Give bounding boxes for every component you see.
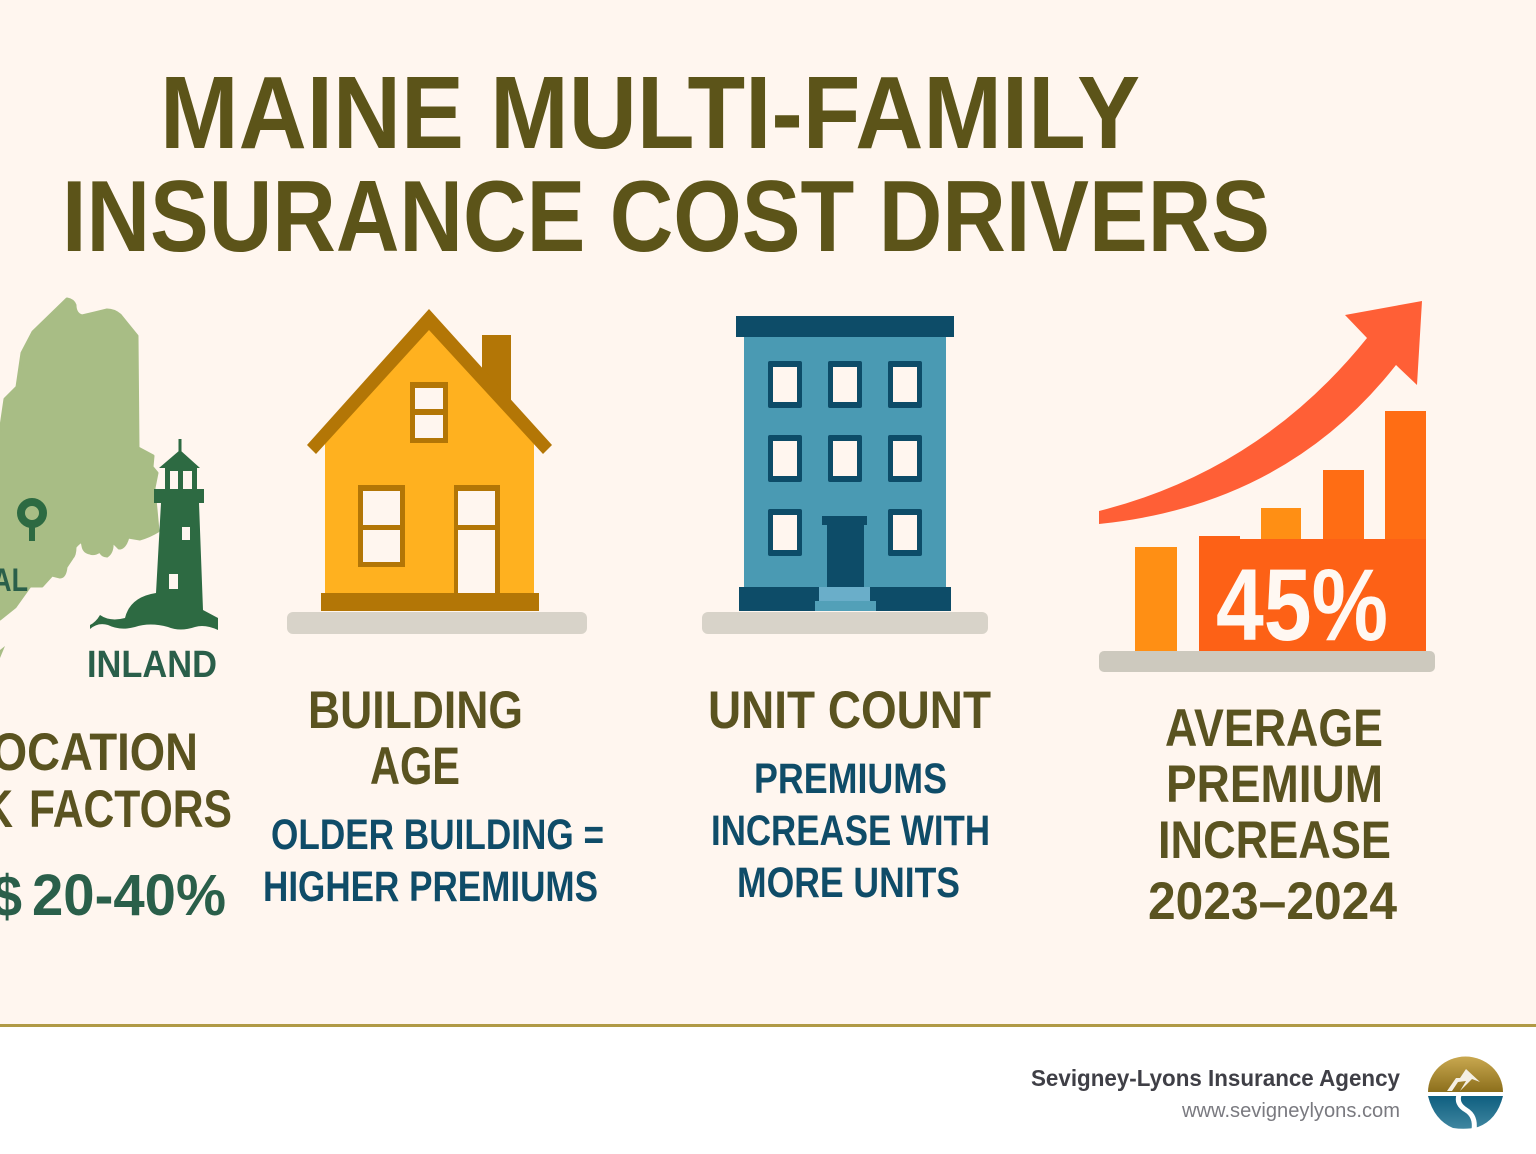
text: premiums increase: MORE UNITS bbox=[737, 859, 960, 907]
heading: average premium increase: INCREASE bbox=[1158, 811, 1391, 870]
heading: average premium increase bbox=[1148, 699, 1397, 931]
inland label: INLAND bbox=[87, 644, 217, 686]
panel: location risk factors bbox=[0, 299, 232, 929]
heading: location risk factors: FACTORS bbox=[29, 780, 232, 839]
panel: average premium increase bbox=[1099, 301, 1435, 931]
text: older building: HIGHER PREMIUMS bbox=[263, 863, 598, 911]
icon: bar chart with arrow bbox=[1099, 301, 1435, 672]
footer bbox=[0, 1024, 1536, 1154]
heading: average premium increase: PREMIUM bbox=[1166, 755, 1383, 814]
agency website: www.sevigneylyons.com bbox=[1181, 1100, 1400, 1122]
stat: 45%: 45% bbox=[1216, 548, 1388, 662]
title bbox=[62, 55, 1270, 273]
heading: building age: BUILDING bbox=[308, 681, 523, 740]
heading: location risk factors bbox=[0, 723, 232, 839]
stat: 20-40%: 20-40% bbox=[32, 863, 226, 928]
title: INSURANCE COST DRIVERS bbox=[62, 161, 1270, 273]
agency name: Sevigney-Lyons Insurance Agency bbox=[1031, 1065, 1400, 1091]
map of Maine bbox=[0, 299, 158, 658]
icon: house bbox=[287, 309, 587, 634]
text: premiums increase: INCREASE WITH bbox=[711, 807, 990, 855]
heading: building age: AGE bbox=[370, 737, 460, 796]
heading: average premium increase: AVERAGE bbox=[1165, 699, 1383, 758]
icon: lighthouse bbox=[90, 439, 218, 630]
heading: unit count: UNIT COUNT bbox=[708, 681, 991, 740]
panel: building age bbox=[263, 309, 604, 911]
icon: agency logo bbox=[1428, 1057, 1503, 1130]
text: premiums increase bbox=[711, 755, 990, 907]
heading: building age bbox=[308, 681, 523, 796]
heading: average premium increase: 2023–2024 bbox=[1148, 872, 1397, 931]
text: older building bbox=[263, 811, 604, 911]
icon: apartment building bbox=[702, 316, 988, 634]
text: older building: OLDER BUILDING = bbox=[271, 811, 604, 859]
panel: unit count bbox=[702, 316, 991, 907]
icon: map pin bbox=[21, 502, 43, 541]
text: premiums increase: PREMIUMS bbox=[754, 755, 947, 803]
title: MAINE MULTI-FAMILY bbox=[160, 55, 1140, 170]
